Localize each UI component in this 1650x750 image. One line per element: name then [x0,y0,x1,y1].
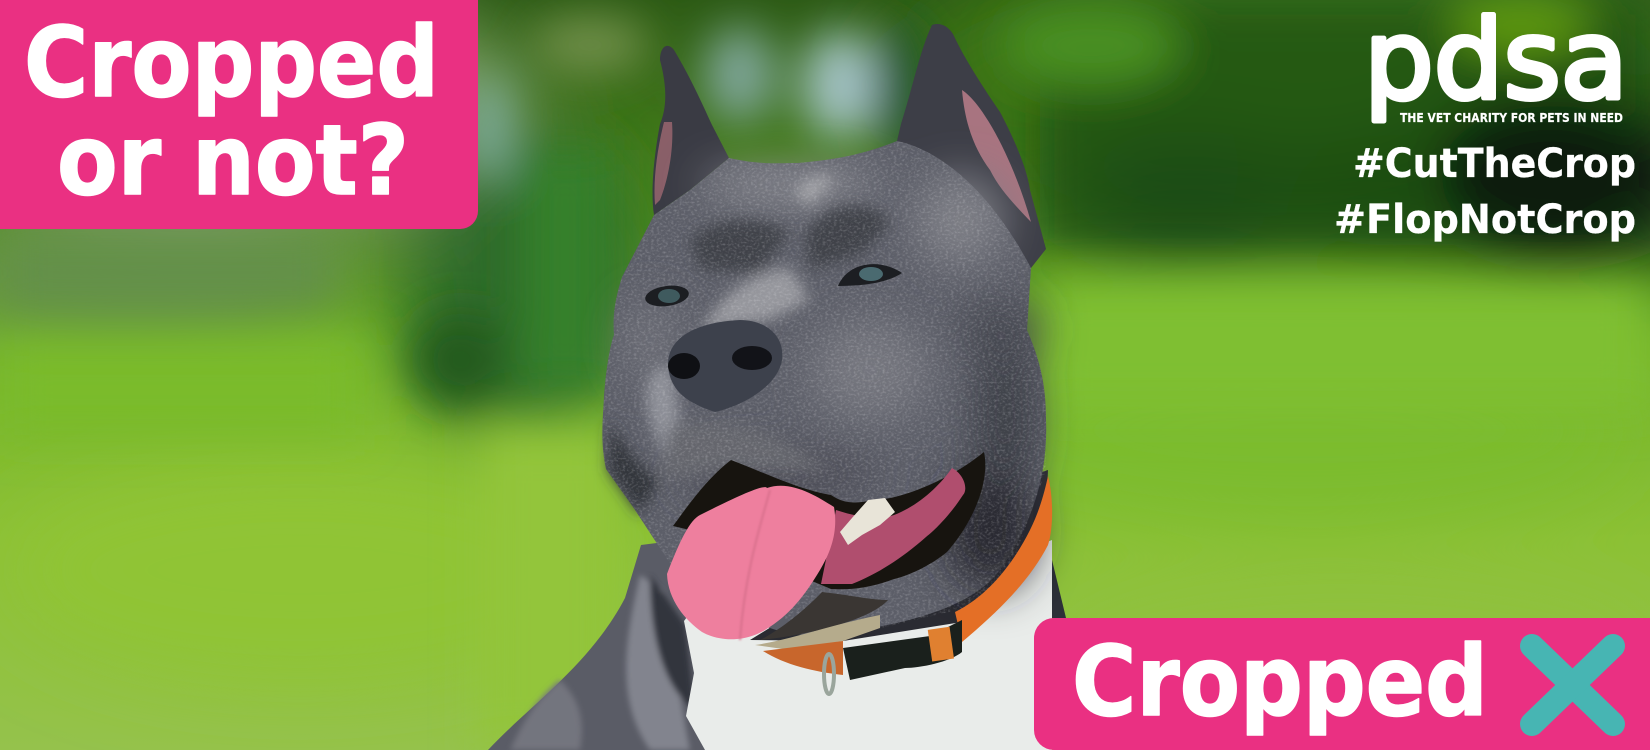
right ear inner [962,90,1031,222]
dark neck under jaw [750,470,1048,641]
left ear [653,46,729,215]
logo: PDSA [1364,0,1628,125]
teeth [840,498,895,545]
verdict label: Cropped [1072,625,1488,738]
lower lip [760,592,888,640]
collar strap orange segment [928,627,954,662]
white chest [684,540,1052,750]
chin [755,615,880,650]
collar ring [824,654,834,694]
collar buckle [843,620,962,680]
dark shoulder patch [1040,560,1066,618]
heading line 2: or not? [57,104,409,217]
gums [821,468,965,584]
panel: Cropped verdict [1034,618,1650,750]
dog photo illustration [488,24,1066,750]
left ear inner [654,122,672,205]
open mouth [673,452,985,589]
collar orange left [763,641,843,675]
collar orange right [955,476,1052,642]
eye: left [644,283,690,309]
fur texture [600,140,1050,640]
chest shading [510,575,695,750]
hashtag: CutTheCrop: #CutTheCrop [1353,141,1636,187]
dog body [488,540,710,750]
nose [668,320,782,412]
facial fur light and dark patches [608,169,1040,590]
heading line 1: Cropped [24,6,439,119]
head [602,141,1046,636]
icon: teal cross [1532,646,1613,724]
tongue [667,486,835,639]
right ear [897,24,1046,268]
eye: right [838,264,902,286]
hashtag: FlopNotCrop: #FlopNotCrop [1334,197,1636,243]
tongue crease [740,490,770,640]
panel: Cropped or not? [0,0,478,229]
